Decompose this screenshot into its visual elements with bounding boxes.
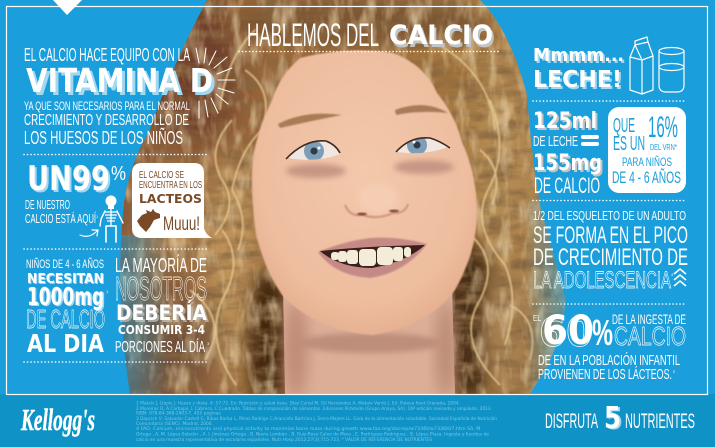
footnotes: Ortega , A. M. López-Sobaler , A. I. Jiménez Ortega , B. Navia Lombán , B. Ruiz-Roso Calvo de Mora , E. Rodríguez-Rodríguez , B. López Plaza. Ingesta y fuentes de (136, 430, 489, 437)
footnotes: 1 Mataix J, Llopis J. Hueso y dieta. 4: 57-72. En: Nutrición y salud ósea. Díaz Curiel M, Gil Hernández A, Mataix Verdú J. Ed. Puleva food.Granada, 2004. (136, 400, 460, 407)
footnotes: 3 Dapcich V, Salvador Castell G, Ribas Barba L, Pérez Rodrigo C,Aranceta Bartrina J, Serra Majem LL. Guía de la alimentación saludable. Sociedad Española de Nutrición (136, 415, 497, 422)
panel: 99 percent: DE NUESTRO (25, 198, 70, 212)
panel: vitamina D: LOS HUESOS DE LOS NIÑOS (24, 127, 183, 148)
right eye (396, 137, 450, 154)
panel: esqueleto adolescencia: 4 (671, 272, 674, 277)
footnotes: ISBN: 978-84-368-2903-7. 455 páginas. (136, 410, 222, 417)
callout: 16 percent VRN: PARA NIÑOS (622, 155, 672, 169)
panel: vitamina D: EL CALCIO HACE EQUIPO CON LA (24, 45, 190, 65)
panel: necesitan 1000mg: 1 (106, 289, 109, 294)
panel: 60 percent: 2 (673, 369, 676, 374)
logo: Kellogg's: Kellogg's (20, 402, 95, 437)
panel: necesitan 1000mg: 1000mg (27, 282, 104, 311)
eyebrows (278, 114, 342, 128)
panel: 60 percent: EL (533, 314, 541, 323)
callout: 16 percent VRN: DEL VRN* (650, 143, 677, 152)
left eye (286, 141, 340, 161)
icon: glass of milk (659, 48, 684, 92)
panel: 125ml = 155mg: DE CALCIO (534, 173, 600, 198)
panel: 125ml = 155mg: 155mg (533, 151, 602, 176)
hair (110, 0, 580, 410)
panel: 60 percent: 60 (542, 308, 594, 354)
panel: 60 percent: 60 (539, 310, 593, 356)
title: CALCIO (391, 23, 495, 54)
footnotes (136, 400, 497, 443)
callout: 16 percent VRN: ES UN (613, 133, 645, 155)
nose (345, 183, 408, 217)
panel: 125ml = 155mg: 155mg (535, 153, 604, 178)
panel: necesitan 1000mg (26, 257, 109, 358)
icon: milk carton (630, 37, 653, 94)
panel: 99 percent: 1 (96, 214, 99, 219)
panel: la mayoria debería: DEBERÍA (116, 300, 208, 325)
under-eye shadows (286, 164, 346, 178)
panel: mmmm leche: Mmmm... (535, 47, 626, 68)
panel: necesitan 1000mg: NIÑOS DE 4 - 6 AÑOS (26, 257, 104, 271)
panel: vitamina D: CRECIMIENTO Y DESARROLLO DE (24, 112, 189, 129)
panel: mmmm leche: LECHE! (535, 69, 624, 95)
panel: 125ml = 155mg: 125ml (533, 109, 597, 134)
footnotes: 2 Moreiras O, A Carbajal, L Cabrera, C Cuadrado. Tablas de composición de alimentos. Ediciones Pirámide (Grupo Anaya, SA). 16ª edición revisada y ampliada. 2013. (136, 405, 492, 412)
panel: vitamina D: YA QUE SON NECESARIOS PARA EL NORMAL (24, 99, 190, 113)
panel: la mayoria debería: DEBERÍA (118, 302, 210, 327)
panel: necesitan 1000mg: NECESITAN (27, 272, 104, 287)
panel: vitamina D (24, 45, 235, 148)
panel: 125ml = 155mg: 125ml (535, 111, 599, 136)
panel: mmmm leche (533, 37, 684, 95)
panel: 99 percent (25, 159, 126, 242)
panel: la mayoria debería: NOSOTROS (115, 270, 207, 307)
panel: la mayoria debería: CONSUMIR 3-4 (118, 323, 205, 337)
footnotes: Comunitaria (SENC). Madrid, 2004. (136, 421, 213, 427)
tagline: disfruta 5 nutrientes (545, 401, 695, 437)
icon: up chevrons (674, 269, 686, 286)
panel: mmmm leche: LECHE! (533, 67, 622, 93)
panel: 125ml = 155mg (533, 109, 604, 198)
mouth (318, 238, 427, 278)
callout: 16 percent VRN: QUE (613, 115, 635, 137)
icon: skeleton (100, 196, 123, 242)
icon: equals sign (583, 137, 597, 144)
panel: vitamina D: VITAMINA D (26, 61, 213, 100)
callout: 16 percent VRN: 16% (648, 111, 678, 144)
panel: necesitan 1000mg: AL DIA (27, 329, 105, 358)
callout: lacteos (132, 163, 212, 238)
panel: necesitan 1000mg: 1000mg (28, 283, 106, 312)
hair edge fades (115, 235, 170, 395)
icon: arrow (80, 230, 98, 236)
footer band (0, 394, 715, 447)
panel: necesitan 1000mg: NECESITAN (28, 273, 105, 288)
panel: la mayoria debería: 3 (207, 341, 210, 346)
panel: 99 percent: CALCIO ESTÁ AQUÍ (25, 211, 96, 226)
callout: lacteos: LACTEOS (139, 191, 202, 206)
callout: lacteos: Muuu! (163, 214, 200, 235)
panel: la mayoria debería: LA MAYORÍA DE (115, 254, 207, 277)
panel: 99 percent: % (111, 163, 126, 185)
tagline: disfruta 5 nutrientes: DISFRUTA (545, 410, 598, 433)
photo: smiling child (110, 0, 580, 410)
footnotes: 4 FAO. Calcium, micronutrients and physical activity to maximize bone mass during growth www.fao.org/docrep/w7336t/w7336t07.htm Sô. M. (136, 425, 482, 432)
icon: sun rays (196, 48, 235, 118)
title: CALCIO (389, 20, 493, 51)
panel: 99 percent: UN99 (27, 159, 110, 199)
tagline: disfruta 5 nutrientes: 5 (604, 401, 621, 436)
panel: 60 percent: % (592, 312, 613, 353)
panel: la mayoria debería (115, 254, 210, 356)
panel: la mayoria debería: PORCIONES AL DÍA (115, 337, 205, 356)
panel: 125ml = 155mg: DE LECHE (533, 133, 578, 150)
footnotes: calcio en una muestra representativa de escolares españoles. Nutr Hosp.2012;27(3):715-723. * VALOR DE REFERENCIA DE NUTRIENTES (136, 437, 432, 443)
panel: esqueleto adolescencia (533, 208, 688, 294)
marker triangle (53, 0, 82, 15)
curls (190, 30, 532, 385)
tagline: disfruta 5 nutrientes: 5 (606, 402, 623, 437)
neck (283, 285, 455, 394)
callout: 16 percent VRN (608, 107, 686, 193)
callout: lacteos: ENCUENTRA EN LOS (139, 180, 202, 191)
icon: cow (137, 209, 160, 232)
title: HABLEMOS DEL (247, 17, 379, 53)
panel: mmmm leche: Mmmm... (533, 45, 624, 66)
panel: vitamina D: VITAMINA D (29, 64, 216, 103)
panel: 99 percent: UN99 (29, 161, 112, 201)
callout: lacteos: EL CALCIO SE (139, 170, 184, 181)
panel: 60 percent: CALCIO (614, 321, 686, 351)
panel: 60 percent (533, 308, 686, 383)
face (252, 50, 477, 335)
panel: necesitan 1000mg: DE CALCIO (26, 304, 105, 334)
